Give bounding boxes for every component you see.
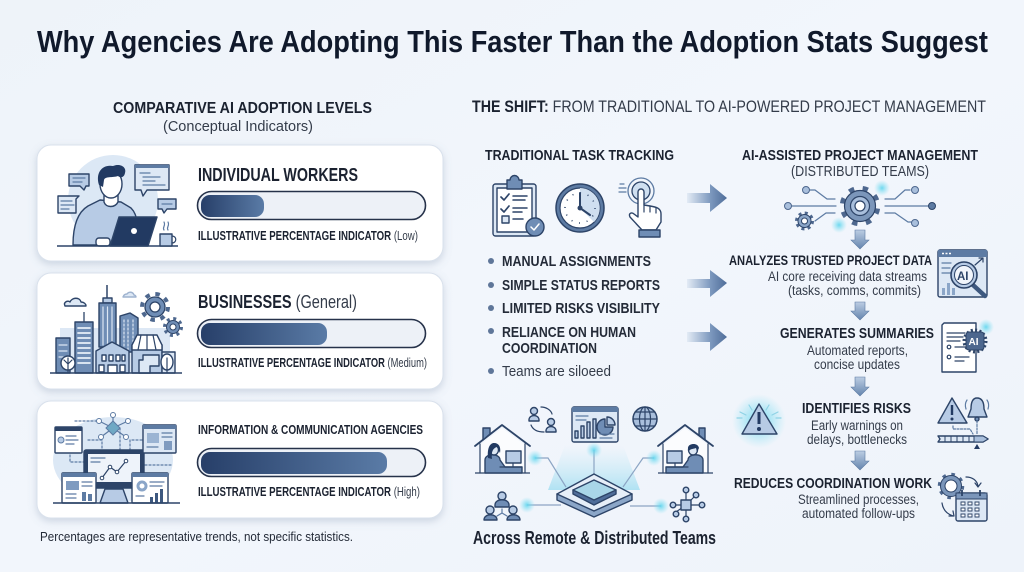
list: traditional limits: Teams are siloeed bbox=[502, 363, 611, 380]
step: reduces coordination work: REDUCES COORDINATION WORK bbox=[734, 475, 932, 492]
step: generates summaries: GENERATES SUMMARIES bbox=[780, 325, 934, 342]
arrow down bbox=[851, 451, 869, 470]
bar: high bbox=[198, 448, 426, 476]
step: reduces coordination work bbox=[734, 475, 932, 521]
panel: information and communication agencies: INFORMATION & COMMUNICATION AGENCIES bbox=[198, 422, 423, 437]
icon: remote worker home left bbox=[475, 425, 530, 473]
step: generates summaries: concise updates bbox=[814, 357, 900, 372]
icon: clipboard bbox=[493, 176, 544, 236]
icon: people exchange bbox=[529, 407, 556, 432]
step: analyzes data bbox=[729, 252, 932, 298]
icon: risk alert timeline bbox=[938, 398, 989, 449]
list: traditional limits bbox=[488, 253, 660, 380]
heading: ai-assisted: (DISTRIBUTED TEAMS) bbox=[791, 164, 929, 180]
icon: dashboards network bbox=[53, 412, 180, 503]
icon: central platform bbox=[557, 474, 632, 517]
list: traditional limits: RELIANCE ON HUMAN bbox=[502, 324, 636, 341]
connector lines bbox=[527, 450, 661, 506]
icon: team bbox=[484, 492, 520, 520]
icon: city with gears bbox=[50, 285, 182, 373]
panel: individual workers bbox=[37, 145, 443, 261]
beam glow bbox=[548, 445, 640, 490]
icon: touch hand bbox=[619, 178, 661, 237]
bar: low bbox=[198, 192, 426, 220]
arrow down bbox=[851, 230, 869, 249]
arrow bbox=[687, 184, 727, 212]
icon: document with AI chip: AI bbox=[968, 337, 979, 348]
list: traditional limits: SIMPLE STATUS REPORTS bbox=[502, 277, 660, 294]
heading: ai-assisted: AI-ASSISTED PROJECT MANAGEMENT bbox=[742, 147, 978, 164]
panel: information and communication agencies bbox=[37, 401, 443, 518]
list: traditional limits: LIMITED RISKS VISIBILITY bbox=[502, 300, 660, 317]
panel: remote and distributed teams bbox=[473, 407, 716, 548]
step: analyzes data: AI core receiving data streams bbox=[768, 269, 927, 284]
panel: information and communication agencies: ILLUSTRATIVE PERCENTAGE INDICATOR (High) bbox=[198, 485, 420, 499]
arrow down bbox=[851, 302, 869, 320]
caption: Across Remote & Distributed Teams bbox=[473, 528, 716, 548]
panel: traditional task tracking bbox=[485, 147, 727, 380]
icon: remote worker home right bbox=[658, 425, 713, 473]
heading: ai-assisted bbox=[742, 147, 978, 180]
step: identifies risks: delays, bottlenecks bbox=[807, 432, 907, 447]
icon: AI magnifier window: AI bbox=[957, 271, 968, 283]
panel: businesses bbox=[37, 273, 443, 389]
panel: businesses: BUSINESSES (General) bbox=[198, 291, 357, 312]
icon: central AI gear with circuits bbox=[784, 180, 936, 233]
panel: individual workers: INDIVIDUAL WORKERS bbox=[198, 164, 358, 185]
heading: traditional: TRADITIONAL TASK TRACKING bbox=[485, 147, 674, 164]
arrow bbox=[687, 270, 727, 297]
heading: comparative adoption levels: COMPARATIVE AI ADOPTION LEVELS bbox=[113, 100, 372, 117]
list: traditional limits: MANUAL ASSIGNMENTS bbox=[502, 253, 651, 270]
step: identifies risks: IDENTIFIES RISKS bbox=[802, 400, 911, 417]
icon: document with AI chip bbox=[942, 319, 994, 372]
bar: medium bbox=[198, 320, 426, 348]
icon: clock bbox=[556, 184, 604, 232]
panel: individual workers: ILLUSTRATIVE PERCENTAGE INDICATOR (Low) bbox=[198, 229, 418, 243]
panel: businesses: ILLUSTRATIVE PERCENTAGE INDICATOR (Medium) bbox=[198, 356, 427, 370]
arrow bbox=[687, 323, 727, 351]
icon: AI magnifier window bbox=[938, 250, 987, 297]
icon: chart dashboard bbox=[572, 407, 618, 442]
arrow down bbox=[851, 377, 869, 396]
icon: person at laptop bbox=[57, 155, 178, 246]
step: analyzes data: (tasks, comms, commits) bbox=[788, 283, 921, 298]
icon: gear and calendar bbox=[940, 474, 987, 521]
icon: globe bbox=[633, 407, 657, 431]
panel: AI-assisted project management bbox=[729, 147, 994, 521]
footnote: Percentages are representative trends, not specific statistics. bbox=[40, 529, 353, 544]
step: analyzes data: ANALYZES TRUSTED PROJECT DATA bbox=[729, 252, 932, 268]
icon: network nodes bbox=[670, 487, 705, 522]
heading: comparative adoption levels bbox=[113, 100, 372, 135]
step: identifies risks: Early warnings on bbox=[811, 418, 903, 433]
list: traditional limits: COORDINATION bbox=[502, 340, 597, 357]
icon: glowing warning bbox=[732, 394, 786, 448]
step: generates summaries: Automated reports, bbox=[807, 343, 908, 358]
step: generates summaries bbox=[780, 325, 934, 372]
step: reduces coordination work: automated follow-ups bbox=[802, 506, 915, 521]
connector nodes bbox=[519, 442, 669, 514]
heading: comparative adoption levels: (Conceptual Indicators) bbox=[163, 119, 313, 135]
step: reduces coordination work: Streamlined processes, bbox=[798, 492, 919, 507]
step: identifies risks bbox=[802, 400, 911, 447]
